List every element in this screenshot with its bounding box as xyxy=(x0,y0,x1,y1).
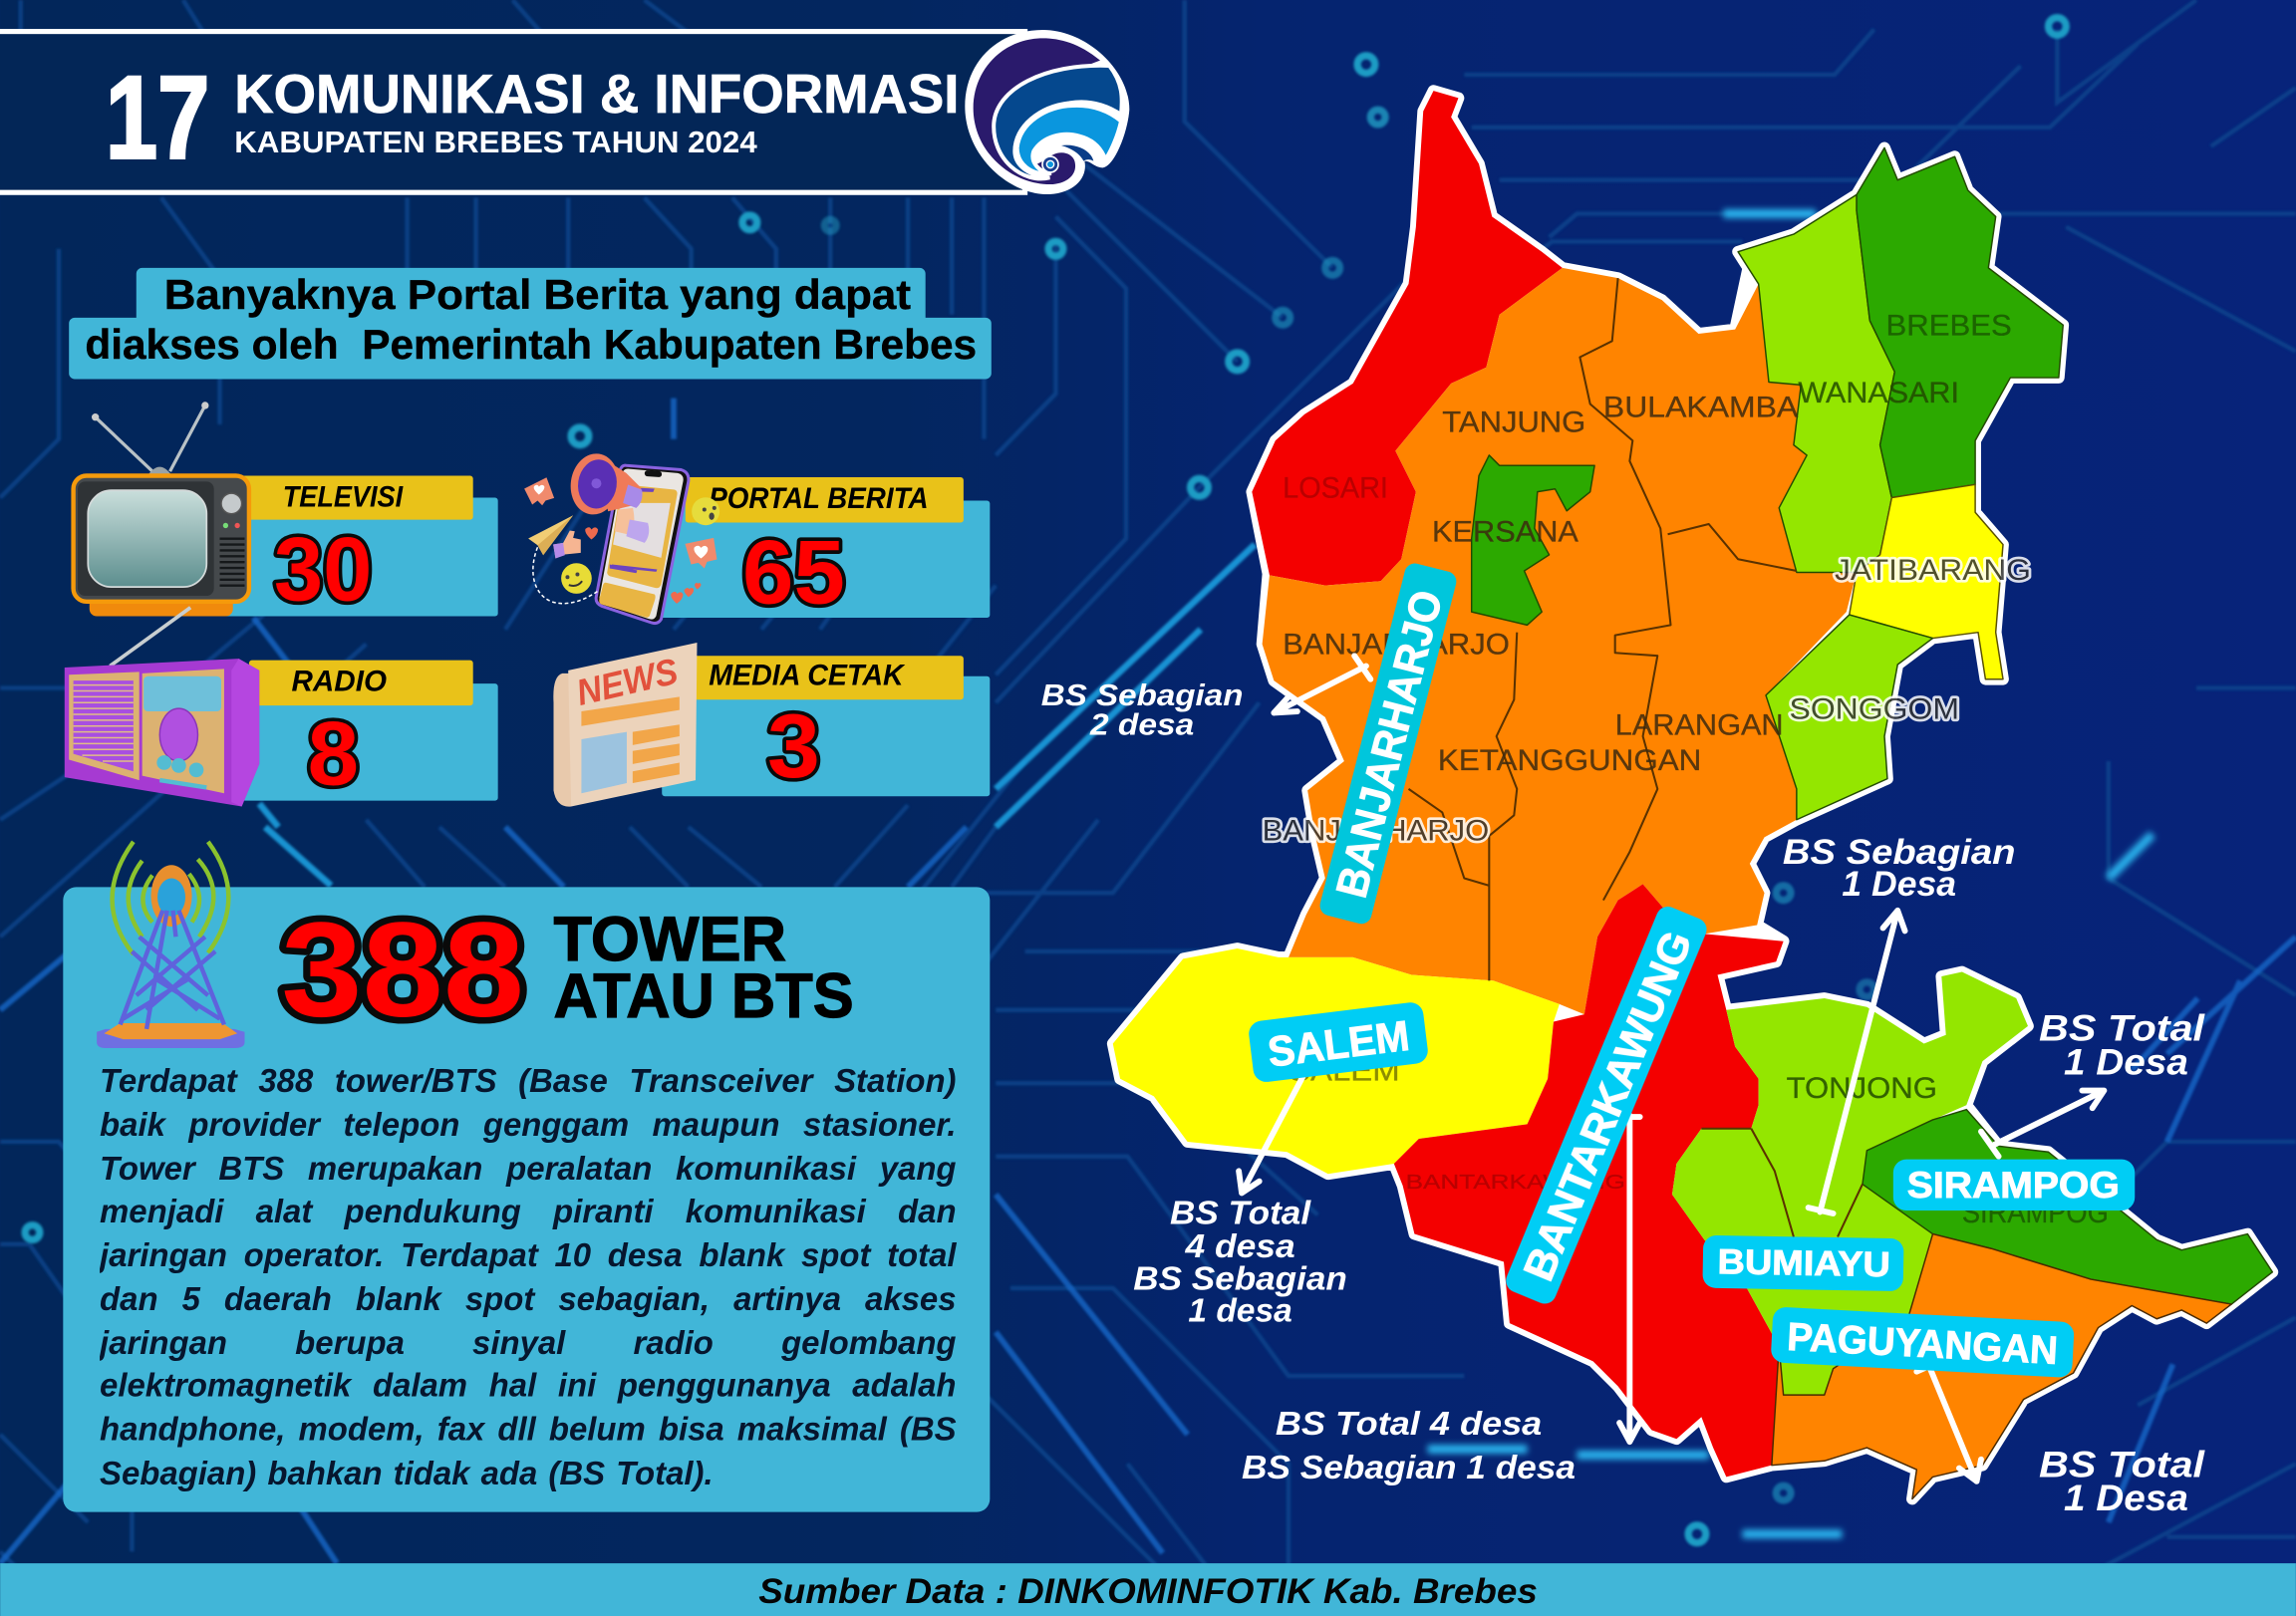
like badge left xyxy=(524,477,554,505)
region: Wanasari xyxy=(1738,194,1894,572)
section number 17: 17 xyxy=(106,53,209,183)
place name labels: LOSARI xyxy=(1283,472,1388,505)
region: Kersana xyxy=(1472,455,1594,625)
body text: Tower BTS merupakan peralatan komunikasi yang xyxy=(100,1150,957,1187)
callout: bantarkawung blank spot: BS Sebagian 1 desa xyxy=(1242,1449,1576,1486)
headline line 2: diakses oleh Pemerintah Kabupaten Brebes xyxy=(85,321,977,368)
dashed ring xyxy=(533,547,598,604)
title: KOMUNIKASI & INFORMASI xyxy=(234,64,959,125)
callout: sirampog blank spot: BS Total xyxy=(2039,1008,2205,1049)
callout: tonjong blank spot xyxy=(1783,833,2016,904)
place name labels: SIRAMPOG xyxy=(1962,1197,2109,1229)
callout: salem blank spot: BS Sebagian xyxy=(1133,1259,1347,1297)
body text: baik provider telepon genggam maupun stasioner. xyxy=(100,1106,957,1143)
region: Losari xyxy=(1252,91,1563,586)
callout: salem blank spot: BS Total xyxy=(1170,1194,1311,1231)
like badge right xyxy=(685,538,717,569)
icon: radio xyxy=(65,608,259,807)
callout: paguyangan blank spot: BS Total xyxy=(2039,1444,2205,1484)
chip: Salem: SALEM xyxy=(1266,1012,1412,1077)
map white outline xyxy=(1113,91,2272,1498)
card: portal berita xyxy=(524,450,990,624)
district boundaries xyxy=(1409,278,1863,1236)
chip: Salem xyxy=(1248,1001,1429,1083)
arrow: bantarkawung xyxy=(1619,1116,1640,1442)
value 30: 30 xyxy=(274,519,372,620)
label radio: RADIO xyxy=(292,665,387,697)
callout: banjarharjo blank spot: 2 desa xyxy=(1089,707,1194,742)
headline box xyxy=(69,268,992,380)
small hearts xyxy=(671,592,683,604)
arrow: sirampog xyxy=(1981,1091,2104,1157)
panel: tower bts xyxy=(63,842,990,1512)
region: Jatibarang xyxy=(1850,484,2003,679)
region: Salem xyxy=(1113,948,1560,1174)
region: Paguyangan xyxy=(1772,1234,2231,1498)
megaphone xyxy=(598,455,641,511)
callout: tonjong blank spot: BS Sebagian xyxy=(1783,833,2016,872)
chip: Paguyangan: PAGUYANGAN xyxy=(1786,1315,2059,1373)
card: media cetak xyxy=(553,643,990,807)
label portal berita: PORTAL BERITA xyxy=(709,482,929,515)
callout: sirampog blank spot: 1 Desa xyxy=(2064,1041,2188,1082)
footer xyxy=(0,1563,2296,1616)
source text: Sumber Data : DINKOMINFOTIK Kab. Brebes xyxy=(758,1572,1538,1611)
value 3: 3 xyxy=(767,696,820,797)
region: Sirampog xyxy=(1863,1110,2272,1304)
callout: bantarkawung blank spot: BS Total 4 desa xyxy=(1276,1405,1542,1443)
map of Brebes regency xyxy=(1113,91,2272,1498)
headline line 1: Banyaknya Portal Berita yang dapat xyxy=(164,271,911,318)
callout: salem blank spot: 1 desa xyxy=(1188,1292,1292,1330)
body text: elektromagnetik dalam hal ini penggunanya adalah xyxy=(100,1368,957,1404)
atau bts heading: ATAU BTS xyxy=(554,961,854,1031)
arrow: tonjong xyxy=(1809,911,1905,1213)
callout: salem blank spot xyxy=(1133,1194,1347,1330)
subtitle: KABUPATEN BREBES TAHUN 2024 xyxy=(234,125,757,159)
callout: banjarharjo blank spot: BS Sebagian xyxy=(1041,677,1243,712)
place name labels: KETANGGUNGAN xyxy=(1438,744,1701,777)
icon: newspaper: NEWS xyxy=(573,651,682,713)
callout: tonjong blank spot: 1 Desa xyxy=(1842,865,1956,904)
chip: Bumiayu xyxy=(1702,1235,1904,1291)
region: Bantarkawung xyxy=(1394,884,1784,1477)
value 65: 65 xyxy=(742,522,845,623)
arrow: salem xyxy=(1239,1076,1303,1193)
place name labels: WANASARI xyxy=(1798,377,1959,409)
place name labels: BANJARHARJO xyxy=(1263,814,1489,847)
place name labels: KERSANA xyxy=(1432,516,1578,549)
ribbon: Banjarharjo: BANJARHARJO xyxy=(1327,586,1452,903)
callout: paguyangan blank spot: 1 Desa xyxy=(2064,1478,2188,1518)
icon: newspaper xyxy=(553,643,697,807)
region: Songgom xyxy=(1766,615,1932,820)
logo xyxy=(965,30,1129,194)
callout: paguyangan blank spot xyxy=(2039,1444,2205,1518)
place name labels: SALEM xyxy=(1289,1054,1400,1087)
body text xyxy=(100,1060,979,1498)
chip: Sirampog xyxy=(1893,1160,2135,1211)
icon: phone with megaphone xyxy=(524,450,719,624)
value 8: 8 xyxy=(308,703,359,804)
callout: salem blank spot: 4 desa xyxy=(1184,1227,1295,1265)
body text: Terdapat 388 tower/BTS (Base Transceiver Station) xyxy=(100,1063,957,1099)
smiley xyxy=(561,563,592,594)
place name labels: BREBES xyxy=(1885,309,2012,342)
place name labels: JATIBARANG xyxy=(1835,554,2031,587)
place name labels: BANJARHARJO xyxy=(1283,629,1510,662)
arrow: paguyangan xyxy=(1916,1361,1981,1481)
callout: bantarkawung blank spot xyxy=(1242,1405,1576,1486)
body text: Sebagian) bahkan tidak ada (BS Total). xyxy=(100,1455,714,1491)
heart icon xyxy=(585,527,598,540)
surprised emoji xyxy=(692,497,719,525)
callout: sirampog blank spot xyxy=(2039,1008,2205,1082)
icon: tower xyxy=(97,842,245,1048)
card: radio xyxy=(65,608,498,807)
icon: television xyxy=(74,402,249,617)
ribbon: Bantarkawung: BANTARKAWUNG xyxy=(1515,925,1702,1287)
place name labels xyxy=(1263,309,2109,1229)
region: Brebes xyxy=(1857,147,2063,498)
arrow: banjarharjo xyxy=(1274,656,1370,713)
place name labels: BULAKAMBA xyxy=(1603,392,1799,424)
chip: Sirampog: SIRAMPOG xyxy=(1907,1165,2120,1206)
callout: banjarharjo blank spot xyxy=(1041,677,1243,742)
body text: handphone, modem, fax dll belum bisa maksimal (BS xyxy=(100,1411,957,1448)
big number 388: 388 xyxy=(281,895,524,1045)
label televisi: TELEVISI xyxy=(283,480,404,513)
body text: jaringan operator. Terdapat 10 desa blank spot total xyxy=(100,1236,957,1273)
body text: jaringan berupa sinyal radio gelombang xyxy=(100,1324,957,1361)
place name labels: TANJUNG xyxy=(1442,405,1585,438)
body text: dan 5 daerah blank spot sebagian, artinya akses xyxy=(100,1280,957,1317)
hand xyxy=(615,508,634,535)
place name labels: LARANGAN xyxy=(1615,709,1784,742)
place name labels: BANTARKAWUNG xyxy=(1406,1171,1625,1194)
place name labels: SONGGOM xyxy=(1790,692,1959,725)
chip: Bumiayu: BUMIAYU xyxy=(1717,1242,1890,1284)
label media cetak: MEDIA CETAK xyxy=(709,660,905,692)
body text: menjadi alat pendukung piranti komunikasi dan xyxy=(100,1194,957,1229)
region: Tonjong and Bumiayu xyxy=(1672,972,2028,1395)
thumbs up xyxy=(553,531,581,559)
region: orange districts xyxy=(1263,268,1857,1014)
paper plane xyxy=(528,515,573,555)
card: televisi xyxy=(74,402,498,620)
tower heading: TOWER xyxy=(554,905,786,974)
phone body xyxy=(596,465,689,624)
place name labels: TONJONG xyxy=(1787,1072,1937,1105)
header banner xyxy=(0,32,1025,192)
